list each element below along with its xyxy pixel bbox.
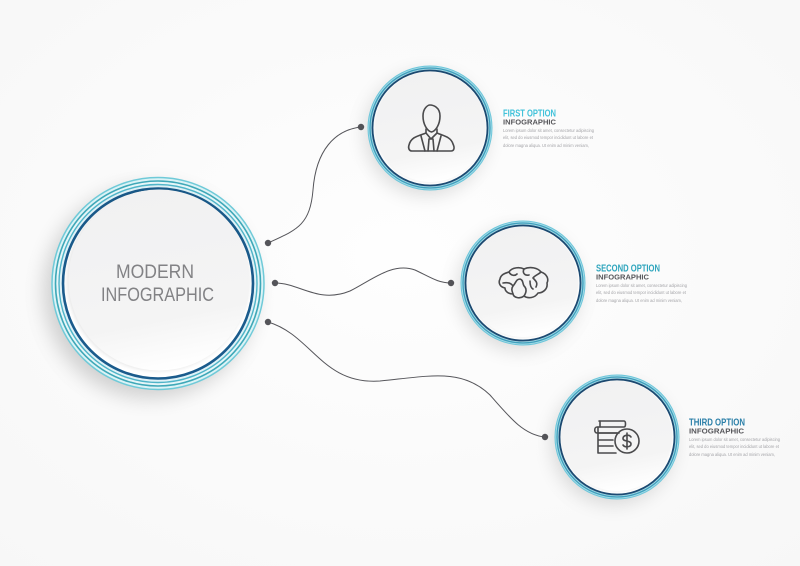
main title: INFOGRAPHIC [101,285,214,306]
option 3 text: elit, sed do eiusmod tempor incididunt ut labore et [689,444,780,449]
option 2 circle [459,221,585,349]
main title: MODERN [116,262,194,283]
icon: brain [499,268,548,298]
option 2 text: SECOND OPTION [596,262,660,274]
option 2 text: Lorem ipsum dolor sit amet, consectetur adipiscing [596,283,687,288]
main circle [44,178,264,398]
option 3 circle [553,375,679,503]
option 1 text: Lorem ipsum dolor sit amet, consectetur adipiscing [503,128,594,133]
option 1 text: elit, sed do eiusmod tempor incididunt ut labore et [503,135,594,140]
option 1 circle [366,66,492,194]
option 2 text: dolore magna aliqua. Ut enim ad minim veniam, [596,298,682,303]
icon: businessman [409,105,454,151]
option 3 text [689,416,780,457]
icon: coins [595,421,639,453]
connector lines [265,124,548,440]
main title [101,262,214,306]
option 2 text: elit, sed do eiusmod tempor incididunt ut labore et [596,290,687,295]
option 2 text: INFOGRAPHIC [596,274,649,282]
option 2 text [596,262,687,303]
option 3 text: INFOGRAPHIC [689,428,744,436]
option 1 text: INFOGRAPHIC [503,120,556,126]
connector: to first option [265,124,364,246]
option 1 text [503,108,594,148]
connector: to third option [265,319,548,440]
option 3 text: Lorem ipsum dolor sit amet, consectetur adipiscing [689,437,780,442]
option 3 text: dolore magna aliqua. Ut enim ad minim veniam, [689,452,775,457]
connector: to second option [272,268,454,295]
option 1 text: FIRST OPTION [503,108,556,120]
option 3 text: THIRD OPTION [689,416,745,428]
option 1 text: dolore magna aliqua. Ut enim ad minim veniam, [503,143,589,148]
